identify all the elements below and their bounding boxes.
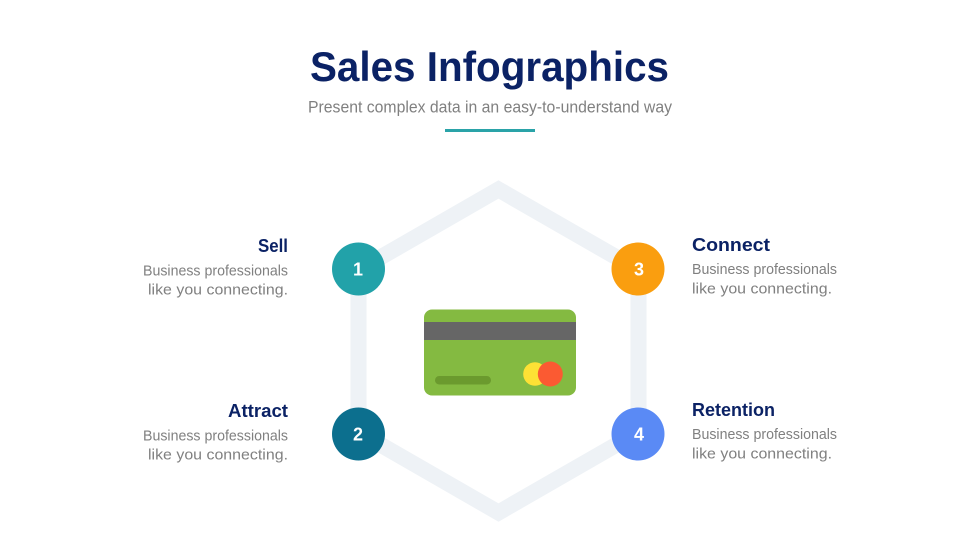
item 1: Sell: Business professionals bbox=[143, 262, 288, 280]
item 1: Sell bbox=[143, 236, 385, 298]
item 3: Connect bbox=[612, 235, 837, 298]
item 2: Attract: like you connecting. bbox=[148, 446, 288, 464]
item 1: Sell: like you connecting. bbox=[148, 282, 288, 298]
hexagon outline bbox=[358, 190, 638, 512]
item 3: Connect: 3 bbox=[634, 260, 644, 280]
item 4: Retention bbox=[612, 400, 837, 462]
item 3: Connect: like you connecting. bbox=[692, 280, 832, 298]
subtitle: Present complex data in an easy-to-understand way bbox=[308, 98, 673, 116]
item 1: Sell: 1 bbox=[353, 260, 363, 280]
item 4: Retention: Retention bbox=[692, 400, 775, 420]
item 2: Attract: Attract bbox=[228, 401, 288, 421]
item 2: Attract: Business professionals bbox=[143, 428, 288, 444]
item 2: Attract bbox=[143, 401, 385, 464]
item 3: Connect: Connect bbox=[692, 235, 770, 255]
item 4: Retention: like you connecting. bbox=[692, 446, 832, 462]
title underline bbox=[445, 129, 535, 132]
item 4: Retention: 4 bbox=[634, 424, 644, 444]
item 3: Connect: Business professionals bbox=[692, 261, 837, 278]
title: Sales Infographics bbox=[310, 43, 669, 90]
item 1: Sell: Sell bbox=[258, 236, 288, 256]
item 4: Retention: Business professionals bbox=[692, 426, 837, 443]
icon: credit card bbox=[424, 310, 576, 396]
item 2: Attract: 2 bbox=[353, 424, 363, 444]
